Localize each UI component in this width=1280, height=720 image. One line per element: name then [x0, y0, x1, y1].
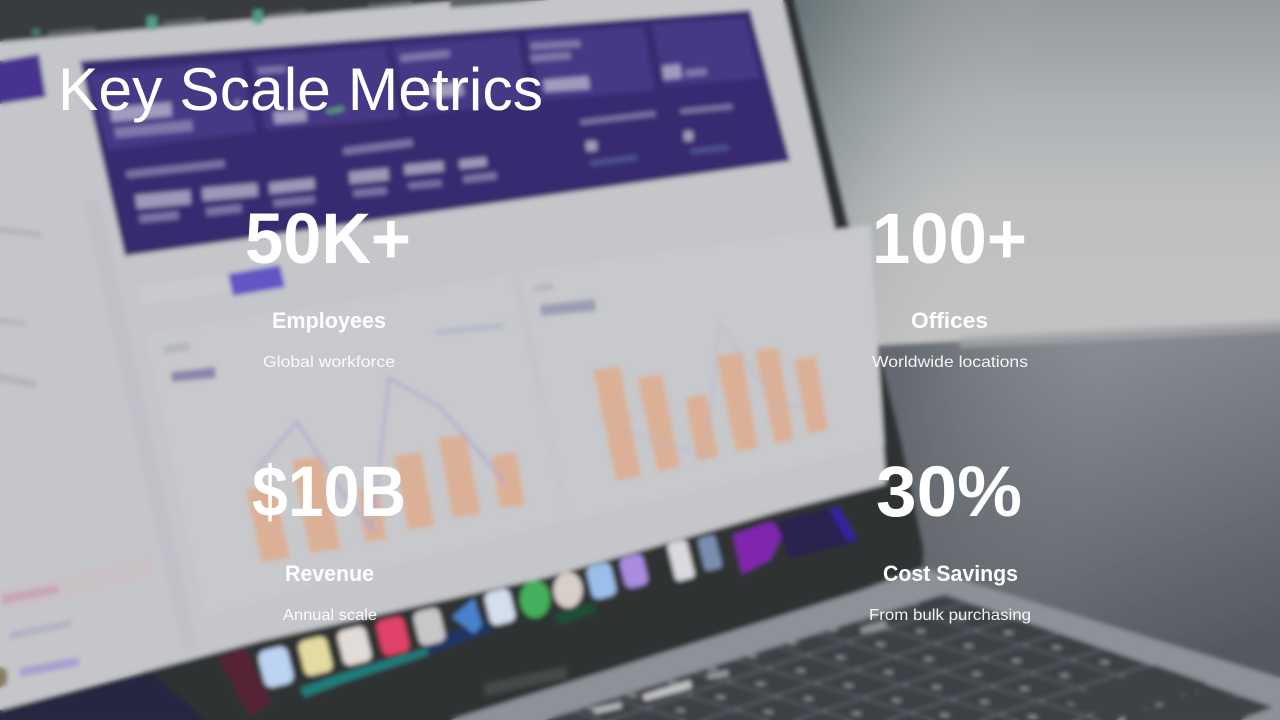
wallpaper: navy band — [426, 620, 490, 655]
purple wallpaper streak — [733, 522, 785, 574]
laptop base silver band — [450, 568, 1280, 720]
left chart line — [256, 378, 506, 530]
purple header panel — [80, 10, 790, 256]
wallpaper: red streaks — [218, 648, 272, 716]
metric: offices — [872, 200, 1028, 371]
sidebar button — [0, 54, 46, 104]
wide keys and highlights — [593, 620, 1270, 720]
description: Global workforce: Global workforce — [263, 354, 395, 371]
right chart bars — [593, 347, 828, 481]
label: Revenue: Revenue — [285, 561, 374, 586]
keyboard — [545, 594, 1273, 720]
description: Annual scale: Annual scale — [283, 607, 377, 624]
screen — [0, 0, 886, 710]
main area tint — [83, 200, 197, 651]
description: Worldwide locations: Worldwide locations — [872, 354, 1028, 371]
laptop name label — [484, 666, 567, 696]
soft shadow band between wall and desk — [960, 320, 1280, 348]
label: Employees: Employees — [272, 308, 386, 333]
sidebar alert row — [0, 553, 157, 613]
value: 100+: 100+ — [872, 200, 1027, 279]
wallpaper: teal band — [300, 647, 430, 697]
tab row — [137, 274, 232, 304]
wallpaper: green glow — [555, 603, 595, 625]
title: Key Scale Metrics — [58, 56, 543, 123]
metric: cost savings — [869, 453, 1031, 624]
left chart bars — [246, 434, 525, 563]
description: From bulk purchasing: From bulk purchasing — [869, 607, 1031, 624]
chart cards — [146, 275, 565, 615]
wall behind laptop, upper — [780, 0, 1280, 347]
left sidebar items — [0, 226, 42, 388]
desk behind laptop, lower — [880, 325, 1280, 720]
wallpaper: navy corner — [0, 671, 205, 720]
laptop bezel — [140, 0, 924, 720]
top browser bar — [0, 0, 470, 42]
value: 30%: 30% — [876, 453, 1022, 532]
dock icons — [257, 534, 723, 689]
label: Cost Savings: Cost Savings — [883, 561, 1018, 586]
metric: employees — [245, 200, 411, 371]
active tab — [228, 265, 285, 296]
value: $10B: $10B — [252, 453, 406, 532]
metric: revenue — [252, 453, 406, 624]
value: 50K+: 50K+ — [245, 200, 411, 279]
label: Offices: Offices — [911, 308, 988, 333]
